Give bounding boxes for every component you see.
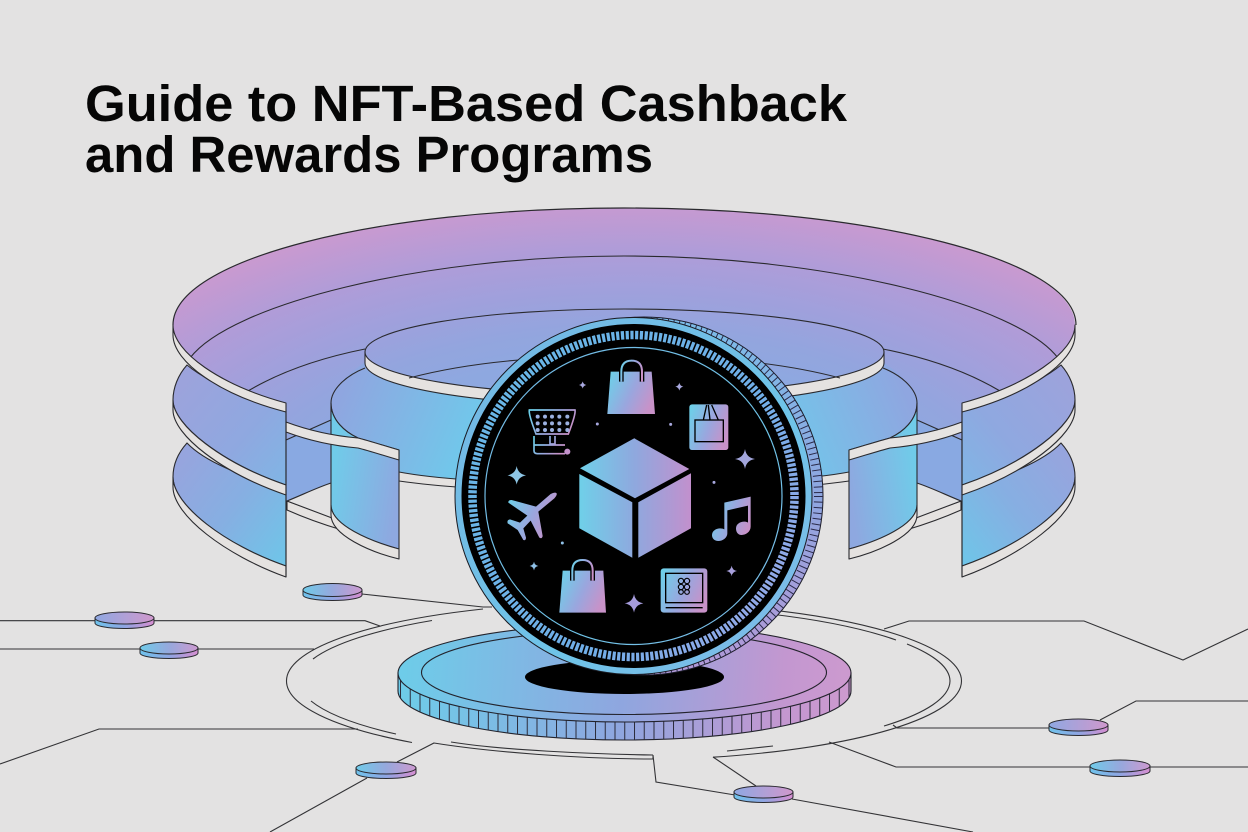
node coin G [1090,760,1150,776]
base coin platform [398,624,851,740]
left half of rings [173,208,624,577]
node coin E [734,786,793,802]
title: and Rewards Programs [85,126,653,183]
node coin B [140,642,198,659]
node coin F [1049,719,1108,736]
icon: airplane [507,493,557,540]
tiered gradient rings [173,208,1076,577]
outer top rim arc [173,208,1076,325]
main NFT coin [455,317,823,675]
small node coins [95,584,1150,802]
title: Guide to NFT-Based Cashback [85,75,848,132]
node coin D [356,762,416,778]
coin icons [507,361,755,613]
icon: sparkles [507,381,755,613]
coin shadow [525,660,724,694]
coin face rings [455,318,812,674]
title [85,75,848,183]
node coin A [95,612,154,628]
icon: NFT cube [579,438,691,558]
raised inner disc [365,309,884,406]
icon: square chip card [661,568,707,613]
icon: keypad terminal [529,410,575,455]
icon: square bag card [689,404,728,450]
coin ribbed edge [465,317,823,675]
icon: music note [712,497,751,541]
node coin C [303,584,362,600]
circuit connector lines [0,594,1248,832]
icon: shopping bag top [607,361,655,414]
right half of rings [624,208,1075,577]
icon: shopping bag bottom [559,560,606,613]
